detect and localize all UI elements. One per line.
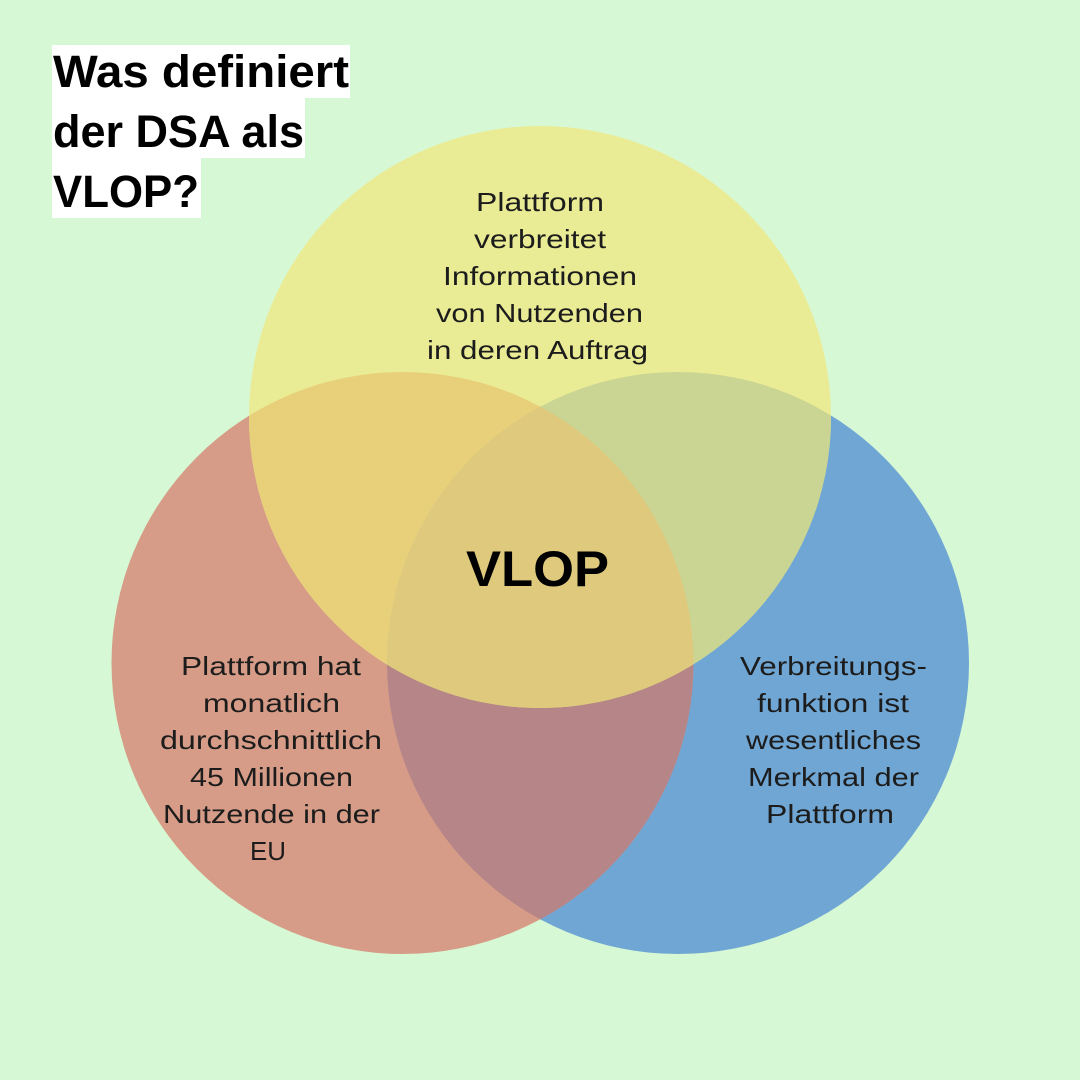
circle: yellow [249,126,831,708]
overlap: red and blue [387,664,694,920]
text: blue circle: wesentliches [745,725,921,755]
text: yellow circle: in deren Auftrag [427,335,648,365]
text: blue circle: Plattform [766,799,894,829]
title: der DSA als [53,106,304,157]
text: red circle: durchschnittlich [160,725,382,755]
text: yellow circle: von Nutzenden [436,298,643,328]
overlap: center [387,407,694,708]
text: red circle: Nutzende in der [163,799,380,829]
text: yellow circle: Plattform [476,187,604,217]
title [52,45,350,218]
text: yellow circle: Informationen [443,261,637,291]
text: blue circle: Verbreitungs- [740,651,927,681]
text: blue circle: funktion ist [757,688,910,718]
title: VLOP? [53,166,199,217]
text: yellow circle [427,187,648,365]
circle: red [112,372,694,954]
text: blue circle: Merkmal der [748,762,919,792]
text: red circle: 45 Millionen [190,762,353,792]
text: red circle [160,651,382,866]
text: yellow circle: verbreitet [474,224,607,254]
text: red circle: EU [250,836,286,866]
title: Was definiert [53,46,349,97]
text: blue circle [740,651,927,829]
text: red circle: Plattform hat [181,651,362,681]
center label: VLOP: VLOP [466,541,609,597]
circle: blue [387,372,969,954]
overlap: yellow and red [249,372,693,708]
overlap: yellow and blue [387,372,831,708]
text: red circle: monatlich [203,688,340,718]
venn diagram [112,126,969,954]
